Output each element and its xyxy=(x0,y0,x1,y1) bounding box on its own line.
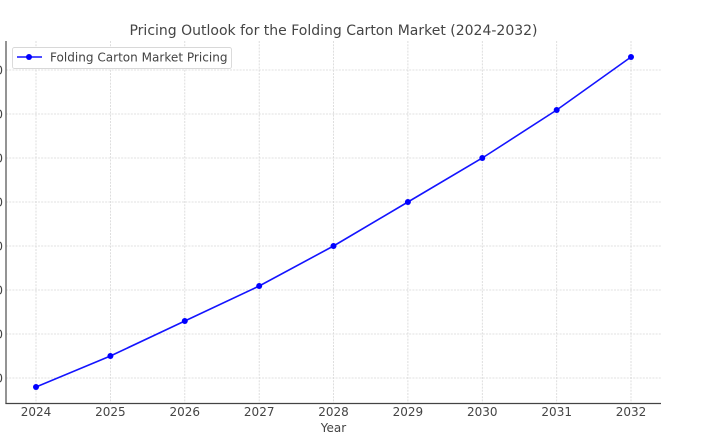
line series: Folding Carton Market Pricing xyxy=(33,54,634,390)
x axis with year labels: 2031 xyxy=(541,405,572,419)
legend xyxy=(12,48,232,68)
x axis with year labels: 2024 xyxy=(21,405,51,419)
legend: Folding Carton Market Pricing xyxy=(50,50,227,64)
x axis with year labels: 2029 xyxy=(393,405,423,419)
x axis with year labels: 2030 xyxy=(467,405,498,419)
title: Pricing Outlook for the Folding Carton Market (2024-2032) xyxy=(129,23,538,39)
x axis with year labels: 2028 xyxy=(318,405,349,419)
x axis with year labels: 2025 xyxy=(95,405,126,419)
x axis with year labels: 2026 xyxy=(170,405,200,419)
x axis title: Year xyxy=(320,421,346,435)
x axis with year labels xyxy=(6,404,661,419)
y axis with clipped tick labels xyxy=(0,41,6,404)
x axis with year labels: 2032 xyxy=(616,405,646,419)
x axis with year labels: 2027 xyxy=(244,405,274,419)
